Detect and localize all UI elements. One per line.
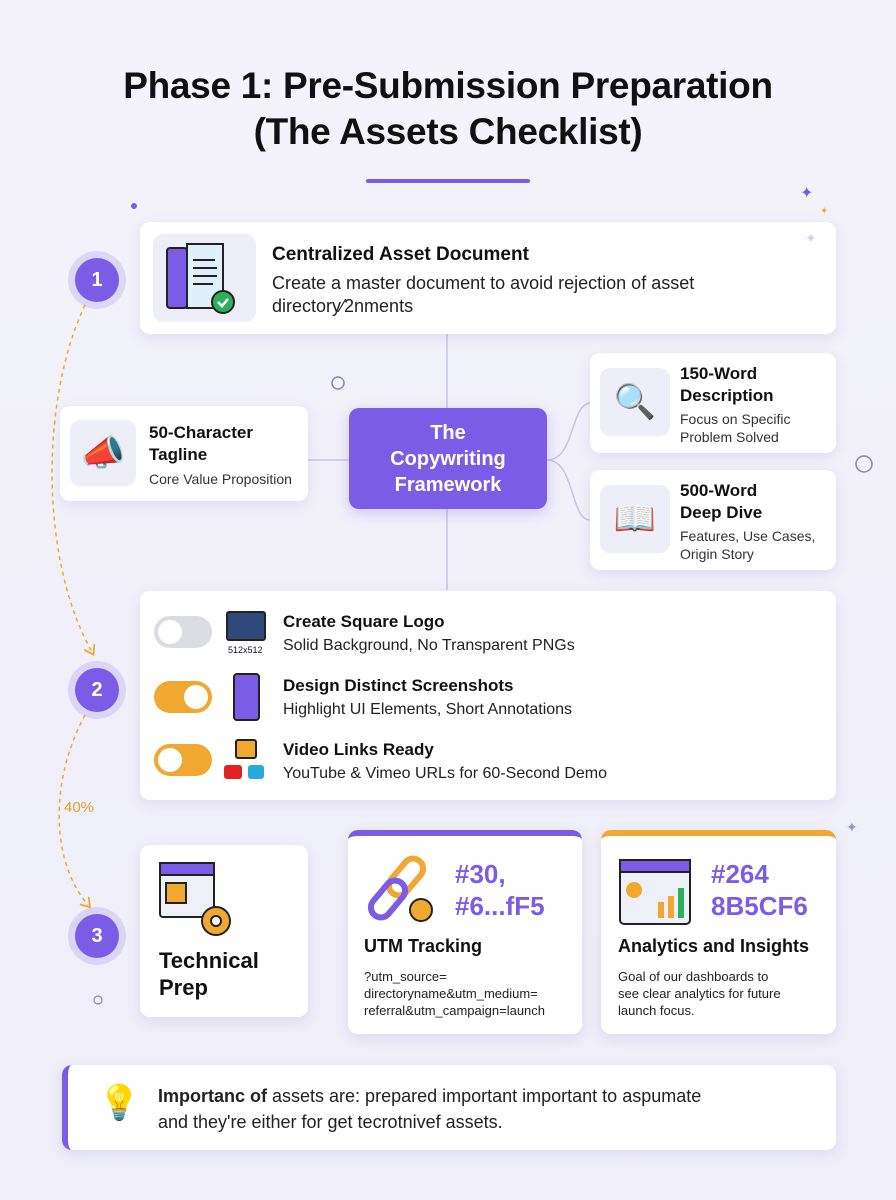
step number 1 bbox=[75, 258, 119, 302]
card: visual assets checklist: YouTube & Vimeo URLs for 60-Second Demo bbox=[283, 765, 607, 782]
title underline bbox=[366, 179, 530, 183]
card: UTM tracking bbox=[348, 830, 582, 1034]
card: visual assets checklist: Design Distinct Screenshots bbox=[283, 676, 514, 695]
step number 3 bbox=[75, 914, 119, 958]
connector lines: ✦ bbox=[800, 185, 813, 202]
card: centralized asset document: Create a master document to avoid rejection of asset bbox=[272, 273, 694, 293]
card: 500-word deep dive: Origin Story bbox=[680, 546, 754, 562]
icon: megaphone: 📣 bbox=[81, 432, 125, 473]
connector lines: ✦ bbox=[846, 819, 858, 835]
card: analytics and insights: see clear analytics for future bbox=[618, 986, 781, 1001]
card: technical prep bbox=[140, 845, 308, 1017]
card: technical prep: Prep bbox=[159, 975, 208, 1000]
icon: megaphone bbox=[70, 420, 136, 486]
card: centralized asset document: directory⁄2nments bbox=[272, 296, 413, 316]
card: 150-word description: Focus on Specific bbox=[680, 411, 790, 427]
card: 500-word deep dive: Features, Use Cases, bbox=[680, 528, 815, 544]
card: UTM tracking: UTM Tracking bbox=[364, 936, 482, 956]
card: tagline: Tagline bbox=[149, 445, 207, 464]
icon: book bbox=[600, 485, 670, 553]
card: tagline bbox=[60, 406, 308, 501]
card: visual assets checklist: 512x512 bbox=[228, 645, 263, 655]
title bbox=[123, 65, 773, 152]
icon: book: 📖 bbox=[614, 500, 656, 538]
card: UTM tracking: ?utm_source= bbox=[364, 969, 447, 984]
icon: doc search: 🔍 bbox=[614, 383, 656, 421]
card: centralized asset document: ✦ bbox=[805, 230, 817, 246]
card: analytics and insights: Analytics and Insights bbox=[618, 936, 809, 956]
toggle off bbox=[154, 616, 212, 648]
title: Phase 1: Pre-Submission Preparation bbox=[123, 65, 773, 106]
step number 3: 3 bbox=[91, 925, 103, 947]
toggle on 2 bbox=[154, 744, 212, 776]
progress label: 40% bbox=[64, 799, 94, 816]
connector lines: ✦ bbox=[820, 206, 828, 217]
card: 150-word description: Problem Solved bbox=[680, 429, 779, 445]
icon: phone bbox=[233, 673, 260, 721]
card: 500-word deep dive bbox=[590, 470, 836, 570]
card: UTM tracking: #6...fF5 bbox=[455, 891, 545, 921]
card: 150-word description: 150-Word bbox=[680, 364, 757, 383]
step number 1: 1 bbox=[91, 269, 103, 291]
card: visual assets checklist: Create Square Logo bbox=[283, 612, 445, 631]
center: copywriting framework: The bbox=[430, 422, 466, 444]
card: analytics and insights: #264 bbox=[711, 859, 769, 889]
card: UTM tracking: directoryname&utm_medium= bbox=[364, 986, 538, 1001]
card: technical prep: Technical bbox=[159, 948, 259, 973]
card: centralized asset document bbox=[140, 222, 836, 334]
card: analytics and insights: launch focus. bbox=[618, 1003, 695, 1018]
callout: importance: and they're either for get tecrotnivef assets. bbox=[158, 1112, 503, 1132]
card: visual assets checklist: Video Links Ready bbox=[283, 740, 434, 759]
center: copywriting framework: Copywriting bbox=[390, 448, 506, 470]
icon: lightbulb: 💡 bbox=[98, 1084, 140, 1122]
card: tagline: 50-Character bbox=[149, 423, 253, 442]
card: analytics and insights: Goal of our dashboards to bbox=[618, 969, 768, 984]
step number 2 bbox=[75, 668, 119, 712]
toggle on bbox=[154, 681, 212, 713]
step number 2: 2 bbox=[91, 679, 103, 701]
icon: code window gear bbox=[159, 862, 231, 936]
icon: documents bbox=[153, 234, 256, 322]
title: (The Assets Checklist) bbox=[254, 111, 642, 152]
icon: video bbox=[235, 739, 257, 759]
card: tagline: Core Value Proposition bbox=[149, 471, 292, 487]
icon: doc search bbox=[600, 368, 670, 436]
card: UTM tracking: #30, bbox=[455, 859, 506, 889]
center: copywriting framework: Framework bbox=[395, 474, 501, 496]
card: 500-word deep dive: 500-Word bbox=[680, 481, 757, 500]
card: 150-word description bbox=[590, 353, 836, 453]
card: UTM tracking: referral&utm_campaign=launch bbox=[364, 1003, 545, 1018]
card: visual assets checklist: Highlight UI Elements, Short Annotations bbox=[283, 701, 572, 718]
card: visual assets checklist bbox=[140, 591, 836, 800]
callout: importance bbox=[62, 1065, 836, 1150]
card: analytics and insights: 8B5CF6 bbox=[711, 891, 808, 921]
callout: importance: Importanc of assets are: prepared important important to aspumate bbox=[158, 1086, 701, 1106]
icon: dashboard bbox=[619, 859, 691, 925]
card: 150-word description: Description bbox=[680, 386, 774, 405]
card: 500-word deep dive: Deep Dive bbox=[680, 503, 762, 522]
icon: chain gear bbox=[368, 856, 433, 922]
card: visual assets checklist: Solid Background, No Transparent PNGs bbox=[283, 637, 575, 654]
center: copywriting framework bbox=[349, 408, 547, 509]
icon: logo bbox=[226, 611, 266, 641]
card: analytics and insights bbox=[601, 830, 836, 1034]
card: centralized asset document: Centralized Asset Document bbox=[272, 244, 529, 265]
